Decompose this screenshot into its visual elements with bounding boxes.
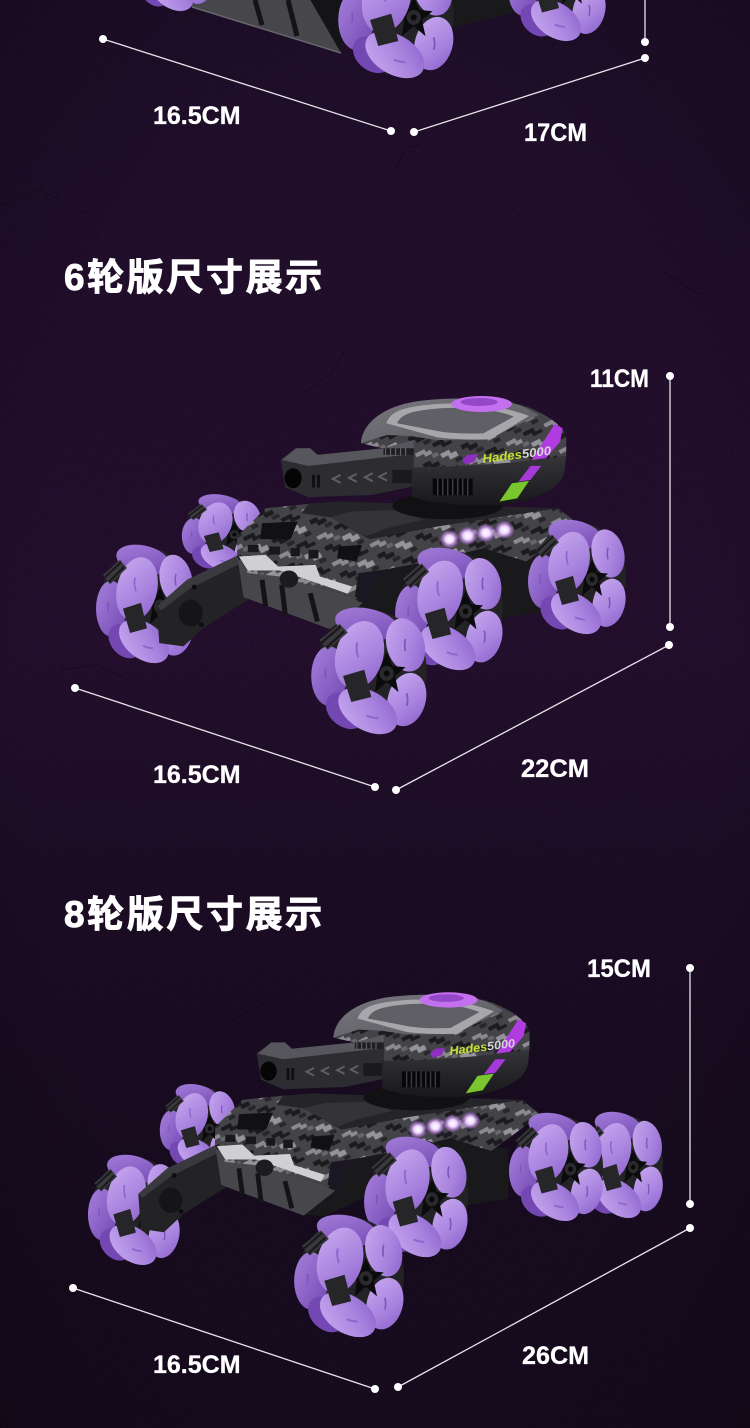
- wheel: rear: [528, 515, 631, 643]
- dimension: length line: [394, 1224, 694, 1391]
- label: 16.5CM: 16.5CM: [153, 761, 241, 789]
- arm: left front: [157, 555, 248, 646]
- label: 22CM: 22CM: [521, 755, 589, 783]
- vehicle hull bottom: [150, 0, 515, 53]
- turret logo: Hades5000: [449, 1036, 516, 1058]
- dimension: length line: [410, 54, 649, 136]
- wheel: back left: [182, 491, 266, 578]
- dimension: width line: [69, 1284, 379, 1393]
- wheel: front left: [88, 1151, 185, 1274]
- turret logo: Hades5000: [482, 443, 552, 466]
- wheel: front: [311, 603, 433, 744]
- label: 16.5CM: 16.5CM: [153, 1351, 241, 1379]
- heading: 8-wheel: 8轮版尺寸展示: [64, 894, 325, 935]
- wheel: front left: [96, 540, 199, 672]
- dimension: height line: [666, 372, 674, 631]
- label: 16.5CM: 16.5CM: [153, 102, 241, 130]
- arm: left front: [138, 1144, 225, 1232]
- wheel: middle: [395, 543, 508, 680]
- dimension: length line: [392, 641, 673, 794]
- dimension: width line: [99, 35, 395, 135]
- wheel: rear: [509, 1109, 608, 1229]
- wheel: front: [294, 1210, 409, 1347]
- label: 26CM: 26CM: [522, 1342, 589, 1370]
- panel: 6-wheel size: [64, 257, 674, 794]
- wheel: front: [338, 0, 460, 88]
- wheel: rear: [508, 0, 611, 50]
- panel: 8-wheel size: [64, 894, 694, 1393]
- dimension: height line: [641, 0, 649, 46]
- wheel: back left: [160, 1081, 240, 1176]
- panel: cropped vehicle at top with dimensions: [99, 0, 649, 147]
- label: 17CM: 17CM: [524, 119, 587, 147]
- wheel: far rear: [577, 1108, 668, 1226]
- label: 11CM: 11CM: [590, 365, 649, 393]
- tank body and turret: [237, 396, 578, 630]
- dimension: width line: [71, 684, 379, 791]
- wheel: left: [128, 0, 221, 20]
- heading: 6-wheel: 6轮版尺寸展示: [64, 257, 325, 298]
- dimension: height line: [686, 964, 694, 1208]
- label: 15CM: 15CM: [587, 955, 651, 983]
- wheel: middle: [364, 1132, 473, 1266]
- tank body and turret: [215, 992, 541, 1216]
